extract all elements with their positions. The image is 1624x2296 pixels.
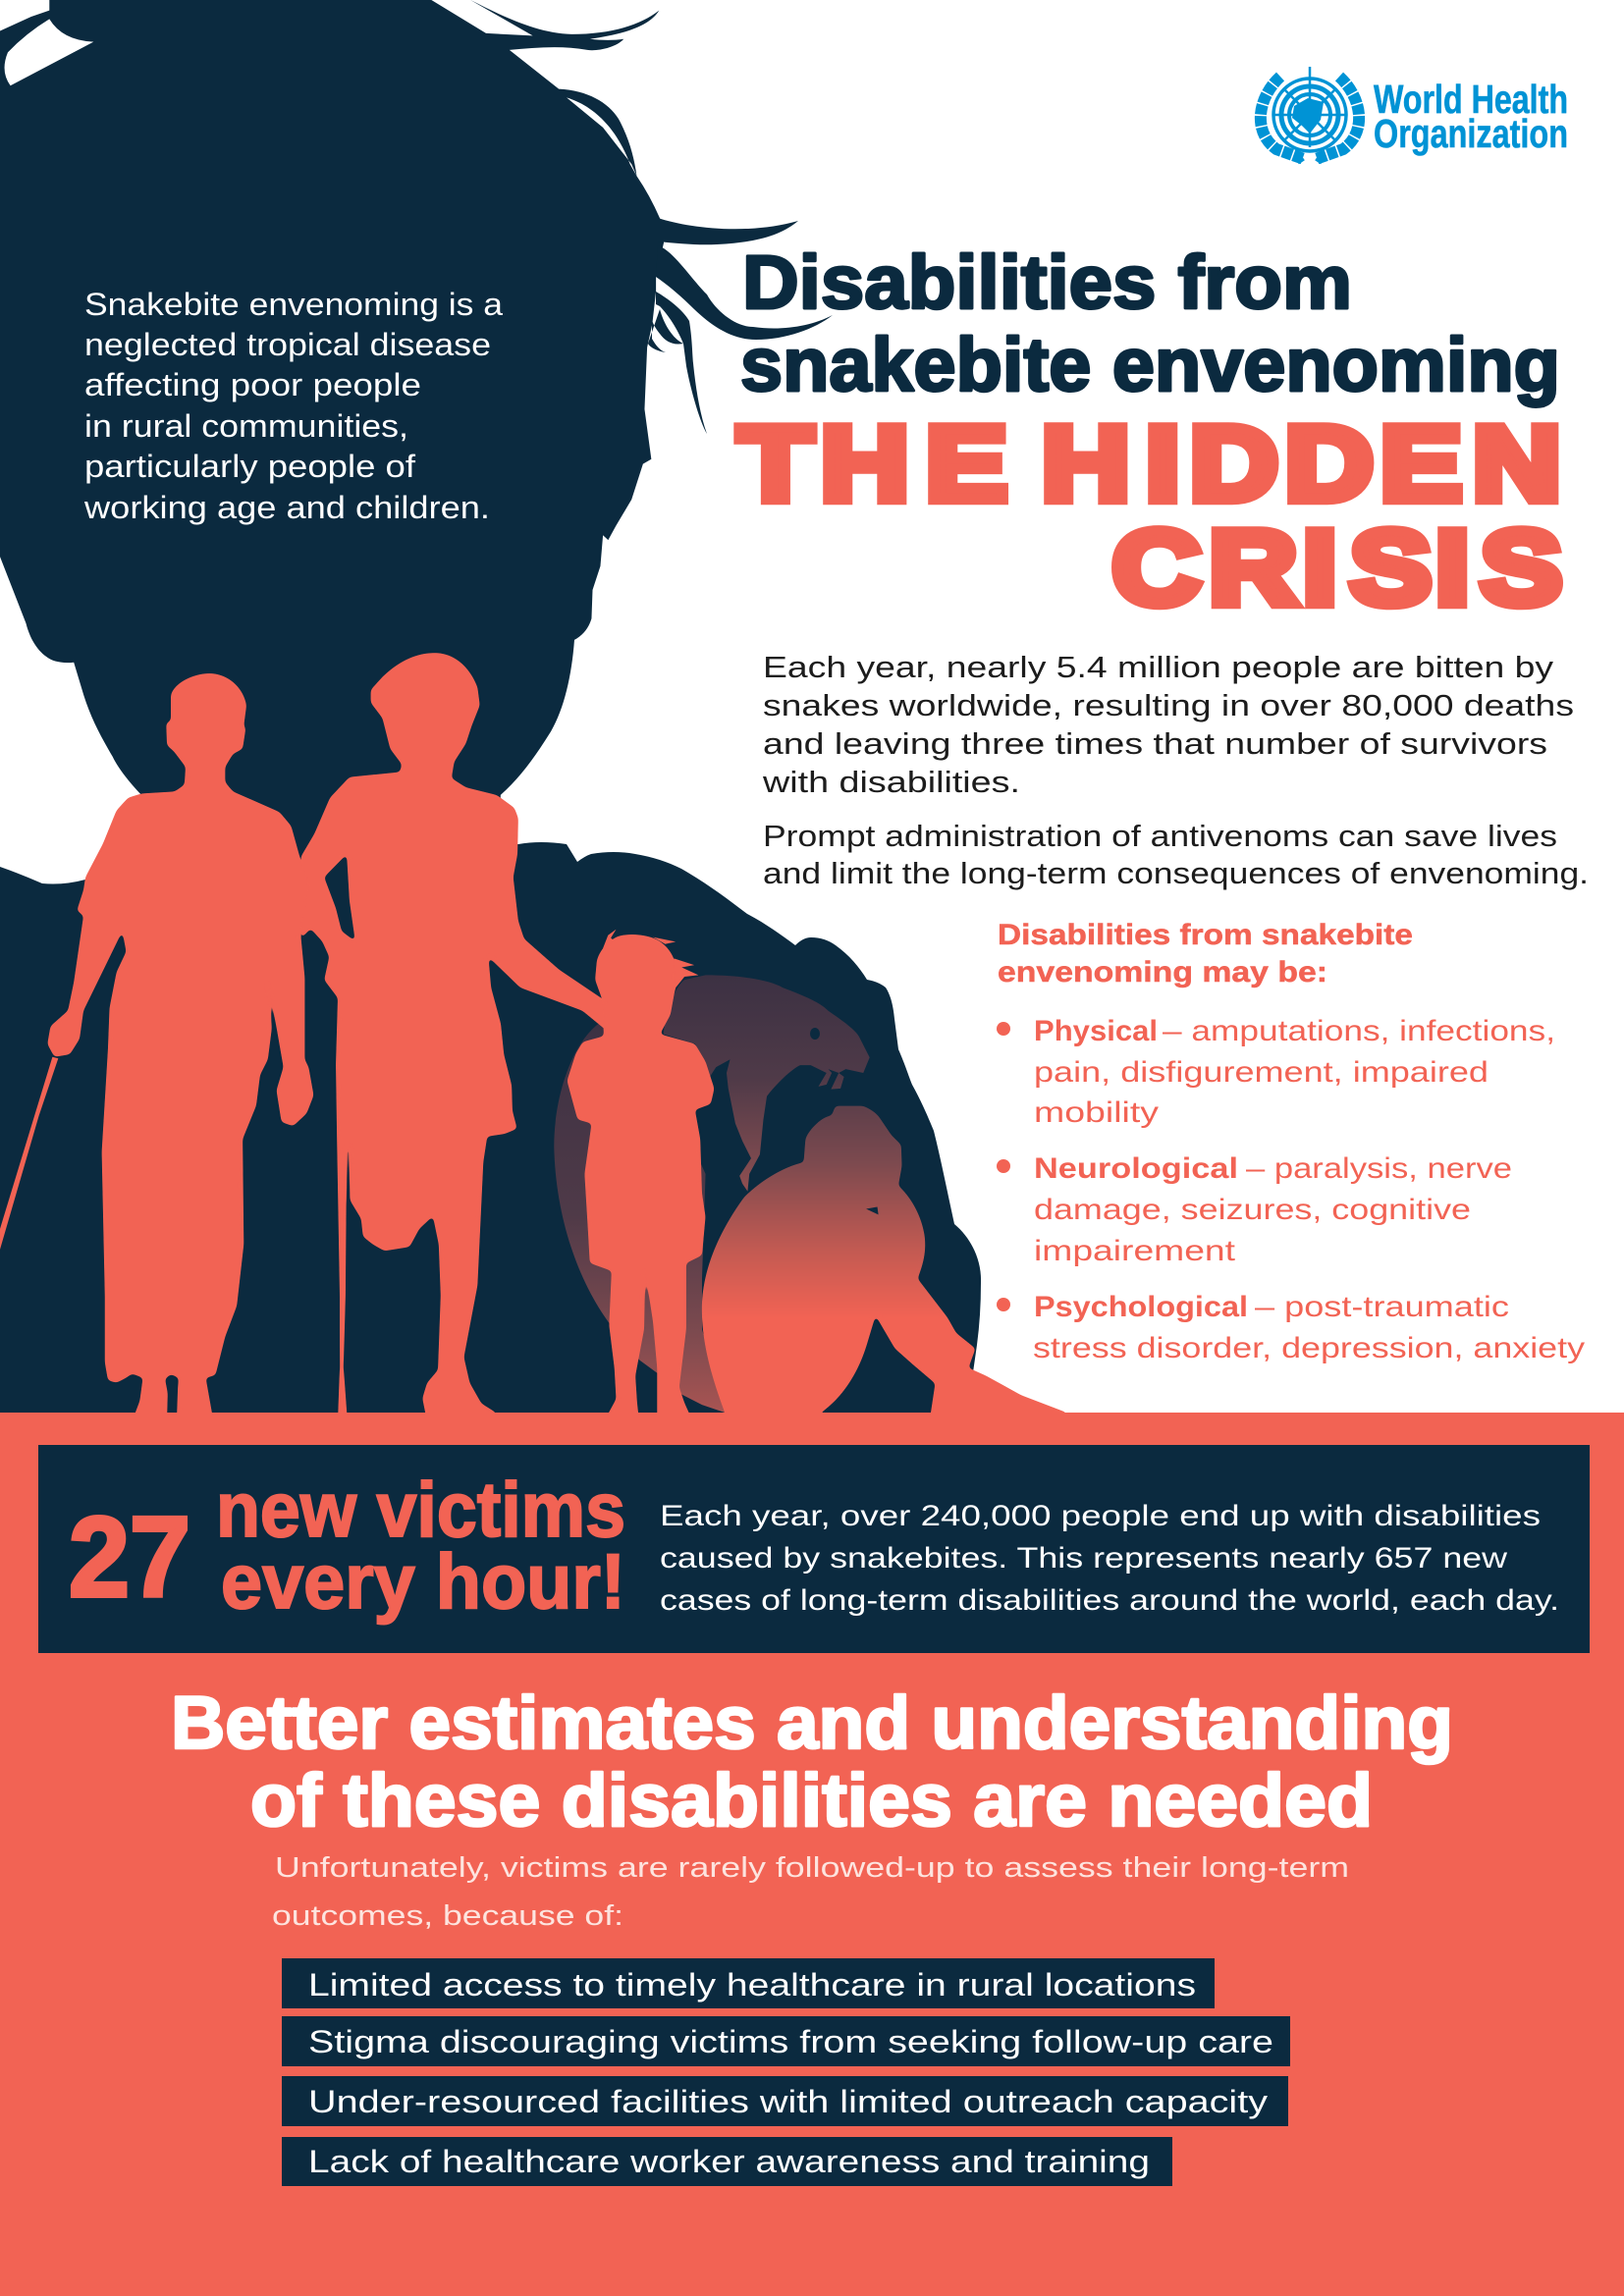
heading: better estimates — [171, 1682, 1453, 1842]
reason 1 — [282, 1958, 1215, 2008]
bullet: neurological: – paralysis, nerve — [1246, 1152, 1512, 1185]
new victims every hour callout: every hour! — [221, 1537, 625, 1625]
bullet: neurological: impairement — [1034, 1235, 1236, 1267]
icon: UN emblem with staff and wreath — [1261, 67, 1359, 163]
hair strands beside title — [648, 218, 833, 434]
new victims every hour callout — [216, 1466, 625, 1625]
intro text block on navy head: particularly people of — [84, 449, 415, 484]
gap between seated person's arm and knee — [866, 1206, 879, 1214]
WHO logo — [1261, 67, 1568, 163]
logo wordmark: Organization — [1374, 111, 1568, 156]
intro text block on navy head: Snakebite envenoming is a — [84, 287, 503, 322]
intro text block on navy head: affecting poor people — [84, 367, 421, 402]
intro text block on navy head — [83, 287, 503, 525]
intro text block on navy head: neglected tropical disease — [84, 327, 491, 362]
coral figure: woman — [47, 673, 313, 1421]
list of reasons on navy bars — [282, 1958, 1290, 2186]
title: navy heading: Disabilities from — [742, 240, 1352, 325]
bullet: physical: pain, disfigurement, impaired — [1034, 1056, 1489, 1089]
gradient crescent moon shape behind child — [554, 1023, 725, 1413]
text block: yearly snakebite statistics: and leaving three times that number of survivors — [763, 726, 1547, 761]
bullet: psychological: stress disorder, depression, anxiety — [1033, 1332, 1585, 1364]
text block: yearly snakebite statistics: snakes worldwide, resulting in over 80,000 deaths — [763, 688, 1574, 722]
reason 3: Under-resourced facilities with limited outreach capacity — [308, 2084, 1268, 2119]
logo wordmark — [1374, 77, 1568, 156]
bullet: neurological — [997, 1152, 1512, 1267]
text block: follow-up — [272, 1852, 1349, 1932]
text block: yearly snakebite statistics: Each year, nearly 5.4 million people are bitten by — [763, 650, 1554, 684]
title: THE HIDDEN CRISIS: THE HIDDEN — [738, 404, 1561, 522]
large navy silhouette: child head, hair and body — [0, 0, 981, 1414]
coral figure: man with amputated leg and crutch — [300, 653, 614, 1421]
bullet: neurological: damage, seizures, cognitive — [1034, 1194, 1471, 1226]
intro text block on navy head: in rural communities, — [84, 408, 408, 444]
panel description: cases of long-term disabilities around the world, each day. — [660, 1584, 1559, 1617]
text block: follow-up: outcomes, because of: — [272, 1900, 623, 1932]
list heading: envenoming may be: — [998, 956, 1327, 988]
panel description: Each year, over 240,000 people end up with disabilities — [660, 1500, 1541, 1532]
intro text block on navy head: working age and children. — [83, 490, 490, 525]
coral ground and lower background — [0, 1413, 1624, 2296]
text block: yearly snakebite statistics: and limit the long-term consequences of envenoming. — [763, 856, 1589, 890]
panel description — [660, 1500, 1559, 1617]
coral figure: small child — [567, 930, 714, 1418]
bullet: psychological: – post-traumatic — [1255, 1291, 1509, 1323]
list heading: Disabilities from snakebite — [998, 919, 1413, 951]
text block: yearly snakebite statistics: with disabilities. — [762, 765, 1020, 799]
title: navy heading: snakebite envenoming — [740, 323, 1560, 407]
seated person silhouette — [702, 1106, 1066, 1418]
panel: 27 new victims every hour — [38, 1445, 1590, 1653]
big number 27: 27 — [69, 1493, 190, 1621]
reason 4: Lack of healthcare worker awareness and training — [308, 2144, 1150, 2179]
child's hair tufts — [603, 930, 698, 988]
panel description: caused by snakebites. This represents nearly 657 new — [660, 1542, 1507, 1575]
list heading — [998, 919, 1413, 988]
title: THE HIDDEN CRISIS: CRISIS — [1112, 508, 1562, 626]
snake silhouette — [664, 975, 870, 1192]
title: THE HIDDEN CRISIS — [738, 404, 1562, 626]
reason 2: Stigma discouraging victims from seeking follow-up care — [308, 2024, 1273, 2059]
reason 1: Limited access to timely healthcare in rural locations — [308, 1967, 1196, 2002]
text block: yearly snakebite statistics: Prompt administration of antivenoms can save lives — [763, 819, 1557, 853]
bullet: psychological — [997, 1291, 1585, 1364]
logo wordmark: World Health — [1374, 77, 1568, 122]
bullet: physical: mobility — [1034, 1096, 1159, 1129]
reason 2 — [282, 2016, 1290, 2066]
heading: better estimates: of these disabilities are needed — [250, 1759, 1373, 1842]
walking stick — [0, 1057, 58, 1250]
new victims every hour callout: new victims — [216, 1466, 625, 1553]
bullet: physical: Physical — [1034, 1015, 1158, 1047]
reason 3 — [282, 2076, 1288, 2126]
text block: follow-up: Unfortunately, victims are rarely followed-up to assess their long-term — [275, 1852, 1349, 1884]
bullet: psychological: Psychological — [1034, 1291, 1248, 1323]
text block: yearly snakebite statistics — [762, 650, 1589, 890]
bullet: neurological: Neurological — [1034, 1152, 1238, 1185]
bullet: physical — [997, 1015, 1555, 1129]
disabilities list — [997, 919, 1585, 1364]
reason 4 — [282, 2137, 1172, 2186]
snake eye — [810, 1028, 820, 1040]
heading: better estimates: Better estimates and understanding — [171, 1682, 1453, 1765]
title: navy heading — [740, 240, 1560, 407]
bullet: physical: – amputations, infections, — [1163, 1015, 1555, 1047]
